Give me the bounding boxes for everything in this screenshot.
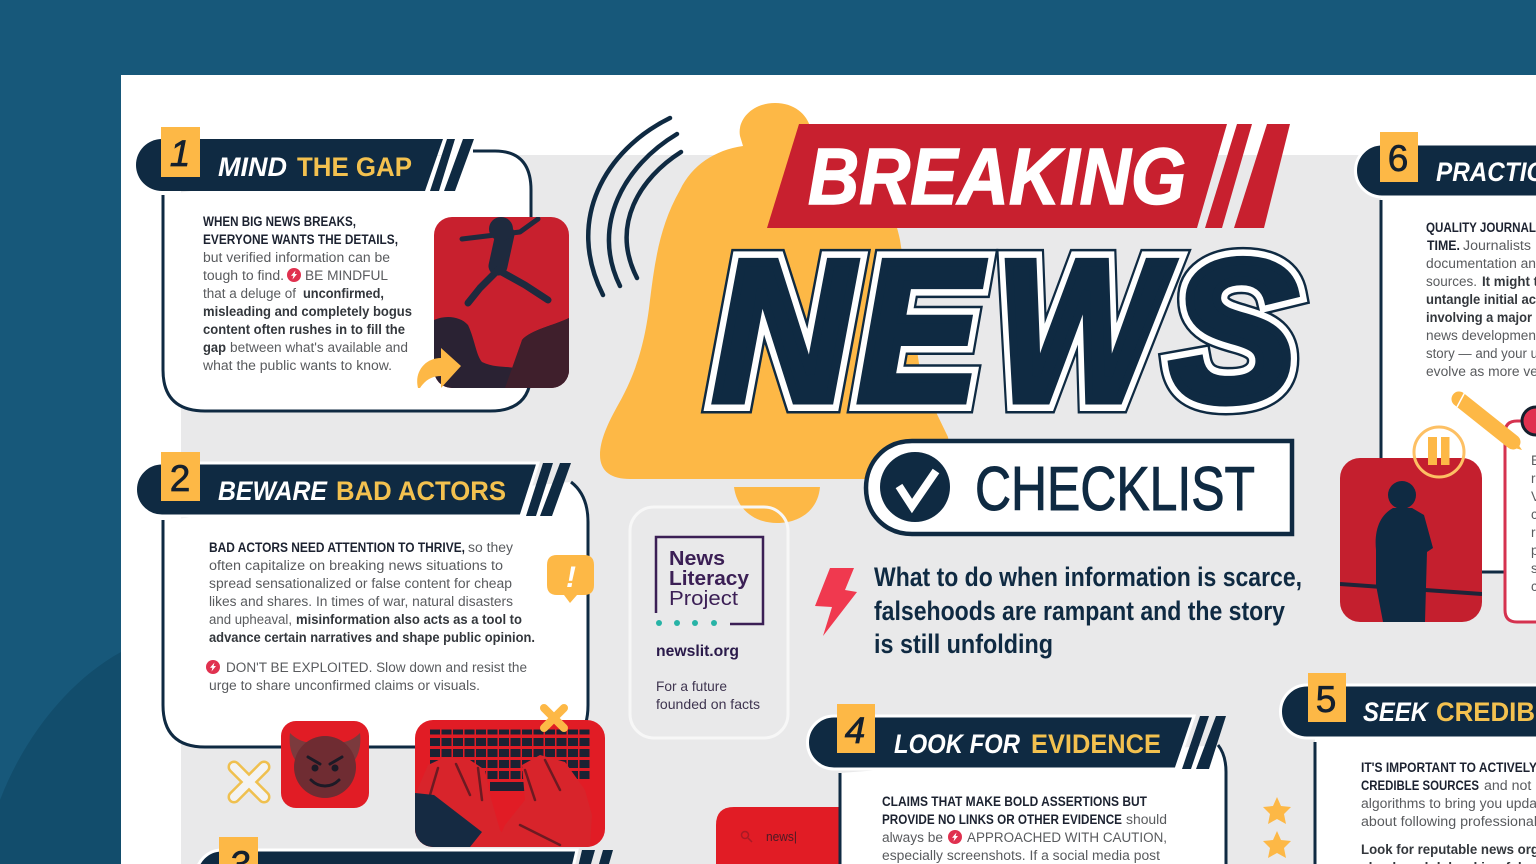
title: News: E [858,220,984,443]
icon: pause [1414,427,1464,477]
text: card 4 body [882,794,1167,863]
text: card 1 body: BE MINDFUL [305,268,388,283]
text: card 4 body: always be [882,830,943,845]
text: card 1 body: misleading and completely bogus [203,304,412,319]
subtitle: is still unfolding [874,629,1053,659]
panel: 4 look for evidence [808,704,1226,864]
title: News: W [996,220,1174,443]
text: card 6 body: Journalists [1463,238,1531,253]
image: news search: news| [766,829,797,844]
icon: check mark [880,452,950,522]
panel: 5 seek credible [1280,673,1536,864]
text: card 1 body [202,214,412,373]
panel: News Literacy Project logo: founded on facts [656,696,760,712]
text: card 6 body: documentation an [1426,256,1536,271]
text: card 4 body: APPROACHED WITH CAUTION, [967,830,1167,845]
title: News: E [858,220,984,443]
text: card 6 body: news developmen [1426,328,1536,343]
panel: tip box: r [1531,471,1536,486]
header: 2: BAD ACTORS [336,476,506,506]
text: card 2 body: often capitalize on breaking news situations to [209,558,503,573]
text: card 2 body: BAD ACTORS NEED ATTENTION TO THRIVE, [209,540,465,555]
header: 4: 4 [845,710,865,751]
grey poster panel [181,155,1536,864]
icon: yellow x [544,708,564,728]
title: News: N [713,220,855,443]
text: card 2 body: and upheaval, [209,612,292,627]
text: card 1 body: but verified information can be [203,250,390,265]
text: card 1 body: tough to find. [203,268,284,283]
text: card 4 body: especially screenshots. If a social media post [882,848,1160,863]
title: News: W [996,220,1174,443]
panel: News Literacy Project logo: News [669,548,725,570]
text: card 6 body [1426,220,1536,379]
image: person silhouette [1340,458,1482,622]
title: Breaking banner [767,124,1290,228]
text: card 6 body: involving a major [1426,310,1533,325]
panel: News Literacy Project logo: Literacy [669,568,750,590]
title: News: W [996,220,1174,443]
subtitle: What to do when information is scarce, [874,562,1302,592]
header: 5 [1280,673,1536,738]
icon: lightning bolt [815,568,857,636]
header: 2: BEWARE [218,476,328,506]
text: card 1 body: content often rushes in to fill the [203,322,405,337]
text: card 4 body: should [1126,812,1167,827]
text: card 6 body: sources. [1426,274,1477,289]
subtitle [874,562,1302,659]
icon: stars [1263,797,1291,858]
panel: 1 mind the gap [136,127,569,411]
title: News [713,220,1297,443]
header: 1: MIND [218,152,287,182]
checklist pill [866,441,1292,534]
header: 5: 5 [1316,679,1336,720]
header: 2 [136,452,571,516]
header: 1 [136,127,474,191]
icon: exclamation bubble: ! [566,561,576,594]
icon: arrow [417,348,461,388]
text: card 5 body: algorithms to bring you upda [1361,796,1536,811]
text: card 5 body: and not r [1484,778,1536,793]
panel: 6 practice [1340,132,1536,622]
image: jumper over gap [434,217,569,388]
text: card 1 body: that a deluge of [203,286,296,301]
panel: News Literacy Project logo: For a future [656,678,727,694]
icon: pencil [1457,392,1522,450]
text: card 6 body: TIME. [1427,238,1460,253]
panel: tip box [1505,407,1536,622]
title: News: S [1170,220,1297,443]
icon: bell [600,103,949,523]
header: 1: THE GAP [297,152,412,182]
header: 2: 2 [170,458,190,499]
header: 4 [808,704,1226,769]
text: card 1 body: unconfirmed, [303,286,384,301]
icon: exclamation bubble [547,555,594,603]
checklist pill: CHECKLIST [975,455,1255,524]
text: card 2 body: so they [468,540,513,555]
image: news search [716,807,840,864]
header: 6: 6 [1388,138,1408,179]
text: card 2 body: DON'T BE EXPLOITED. Slow down and resist the [226,660,527,675]
icon: sound waves [588,118,681,295]
text: card 1 body: what the public wants to know. [202,358,392,373]
header: 4: LOOK FOR [894,729,1020,759]
title: Breaking banner: BREAKING [808,132,1186,221]
text: card 5 body [1361,760,1536,864]
text: card 5 body: about following professional [1361,814,1536,829]
text: card 2 body [206,540,535,693]
header: 5: SEEK [1363,697,1430,727]
header: 1: 1 [170,133,190,174]
icon: outlined x [234,767,264,797]
panel: News Literacy Project logo: newslit.org [656,643,739,660]
background shape [0,652,121,864]
text: card 2 body: advance certain narratives and shape public opinion. [209,630,535,645]
text: card 4 body: CLAIMS THAT MAKE BOLD ASSERTIONS BUT [882,794,1148,809]
panel: News Literacy Project logo: Project [669,588,738,610]
header: 6 [1356,132,1536,197]
title: News: S [1170,220,1297,443]
image: devil emoji [281,721,369,808]
title: News: N [713,220,855,443]
subtitle: falsehoods are rampant and the story [874,596,1285,626]
panel: 2 beware bad actors [136,452,605,847]
text: card 1 body: EVERYONE WANTS THE DETAILS, [203,232,398,247]
panel: News Literacy Project logo [630,507,788,738]
connector line [1482,570,1505,574]
panel: 3 header [196,837,613,864]
text: card 1 body: gap [203,340,226,355]
text: card 1 body: WHEN BIG NEWS BREAKS, [203,214,356,229]
text: card 2 body: misinformation also acts as a tool to [296,612,522,627]
title: News: E [858,220,984,443]
text: card 4 body: PROVIDE NO LINKS OR OTHER EVIDENCE [882,812,1122,827]
text: card 6 body: evolve as more ve [1426,364,1536,379]
title: News: N [713,220,855,443]
text: card 1 body: between what's available and [230,340,408,355]
title: News: S [1170,220,1297,443]
image: hands on keyboard [415,720,605,847]
header: 4: EVIDENCE [1031,729,1161,759]
text: card 2 body: urge to share unconfirmed claims or visuals. [209,678,480,693]
text: card 2 body: likes and shares. In times of war, natural disasters [209,594,513,609]
panel: tip box: r [1531,525,1536,540]
text: card 2 body: spread sensationalized or false content for cheap [209,576,512,591]
text: card 5 body: CREDIBLE SOURCES [1361,778,1479,793]
